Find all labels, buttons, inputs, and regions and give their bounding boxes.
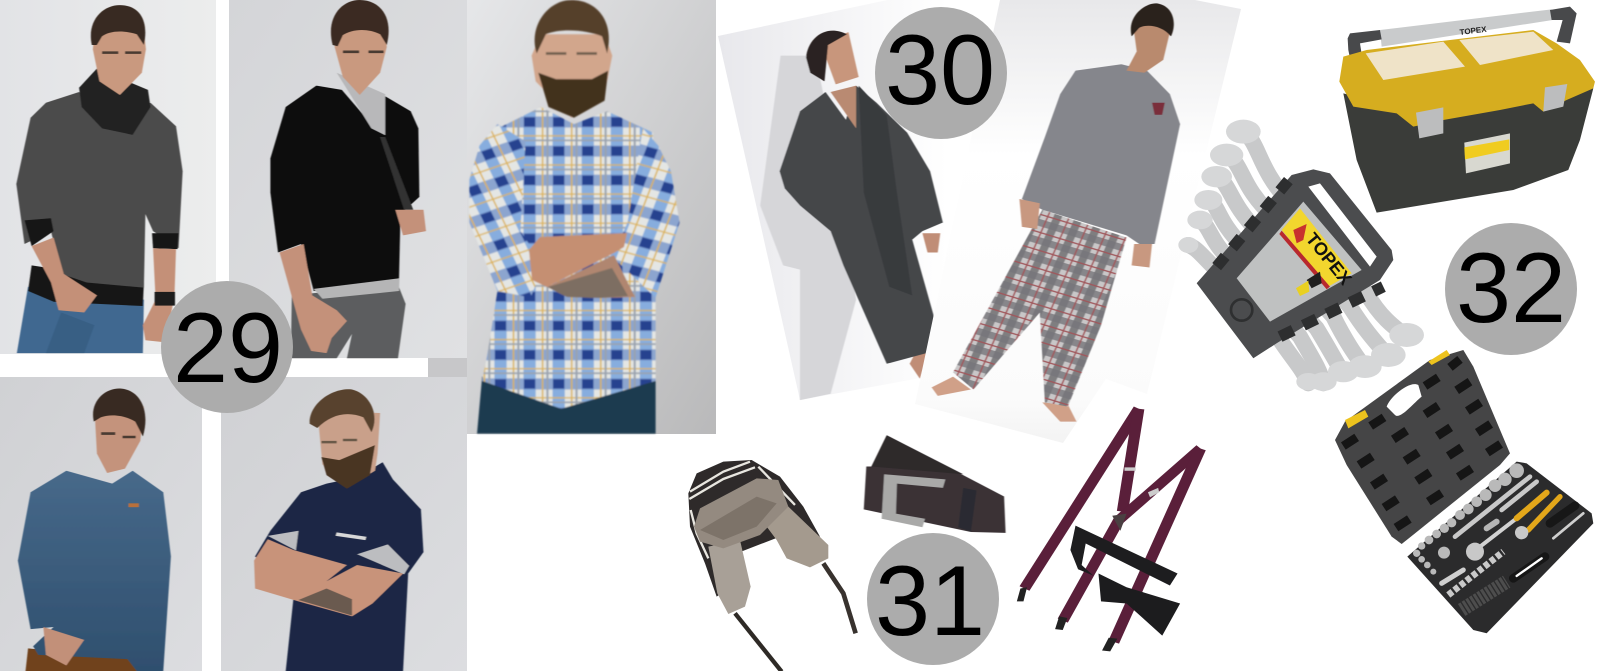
panel: plaid shirt man photo xyxy=(467,0,716,434)
icon: wrench set xyxy=(1178,120,1424,391)
icon: suspenders with bow tie xyxy=(1017,409,1201,651)
panel: black hoodie man photo xyxy=(229,0,467,377)
tattooed crossed arms xyxy=(529,233,635,298)
badge: 31: 31 xyxy=(875,545,985,656)
badge: 29: 29 xyxy=(173,292,283,403)
label: TOPEX on wrench holder: TOPEX xyxy=(1302,229,1356,289)
panel: grey sweater man photo xyxy=(0,0,216,354)
badge: 30: 30 xyxy=(885,14,995,125)
panel: blue sweater man photo xyxy=(0,377,202,671)
icon: leather belt xyxy=(864,435,1006,533)
badge: 32: 32 xyxy=(1456,232,1566,343)
panel: bathrobe man photo xyxy=(718,0,1100,400)
label: TOPEX on toolbox handle: TOPEX xyxy=(1459,25,1488,37)
icon: socket set case xyxy=(1335,350,1593,633)
icon: yellow toolbox xyxy=(1339,7,1595,213)
icon: fur trapper hat xyxy=(688,460,856,671)
panel: navy shirt man photo xyxy=(221,377,467,671)
panel: pajama man photo xyxy=(915,0,1241,443)
